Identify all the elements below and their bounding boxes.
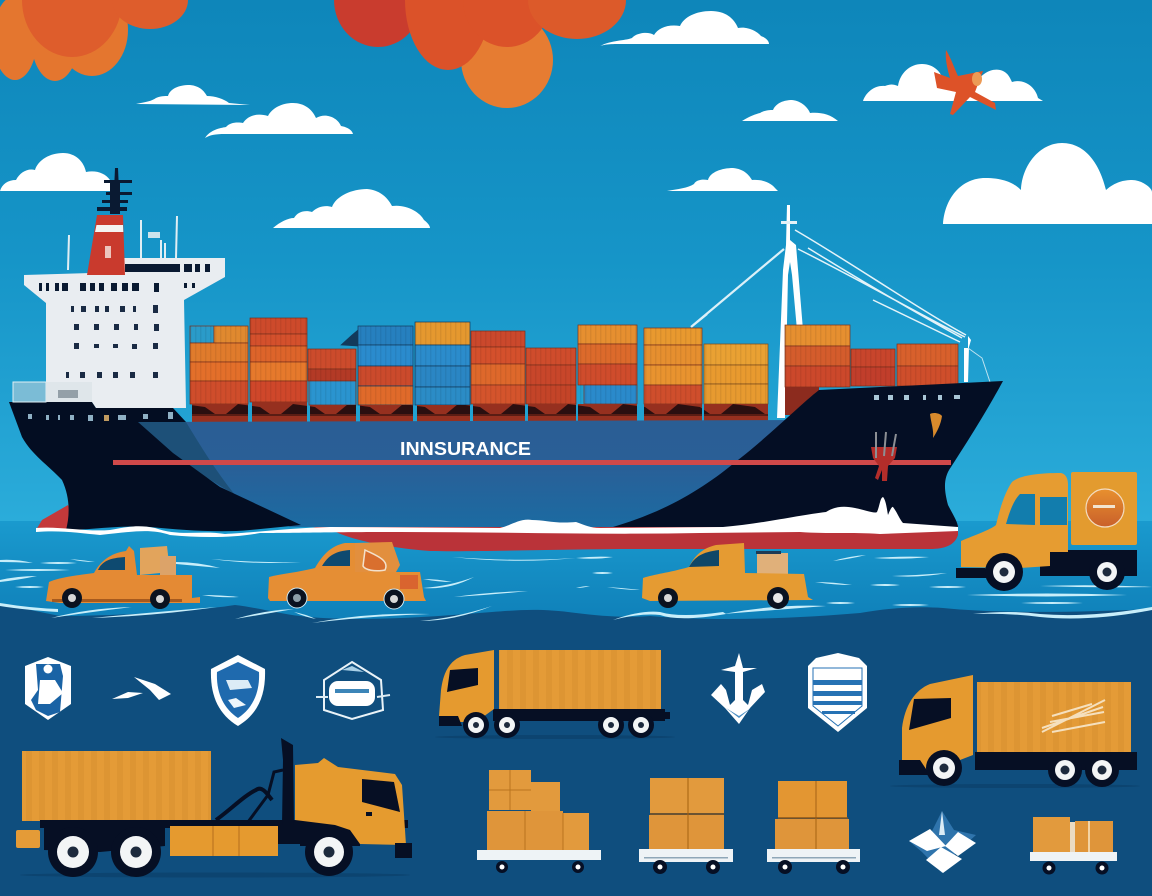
containers: stack 11: [785, 325, 850, 415]
bow emblem: [871, 432, 897, 481]
containers: stack 4: [341, 326, 413, 422]
cloud 6: [0, 153, 110, 191]
ship superstructure: [13, 168, 225, 408]
containers: stack 7: [526, 348, 576, 422]
cloud 5: [205, 103, 353, 138]
containers: stack 8: [578, 325, 637, 422]
icon 2: fish: [112, 677, 171, 700]
pallet of boxes 3: [767, 781, 860, 874]
orange truck right: [899, 675, 1137, 787]
funnel: [87, 215, 125, 275]
shield icon 3: [211, 655, 265, 726]
cabin portholes: [66, 305, 159, 378]
hull: dark blue shade: [138, 422, 235, 495]
wheels: [463, 712, 489, 738]
containers: stack 10: [704, 344, 768, 422]
cloud 3: [742, 100, 838, 121]
sea: [0, 521, 1152, 621]
pallet of boxes 4: [1030, 817, 1117, 874]
wheels: [48, 827, 98, 877]
hull: red stripe: [113, 460, 951, 465]
containers: stack 12: [851, 349, 895, 386]
ship mast and crane: [691, 205, 990, 418]
hull: blue midsection: [130, 420, 815, 527]
bow deck markers: [874, 395, 960, 400]
cargo ship: [9, 168, 1003, 551]
containers: stack 2: [250, 318, 307, 422]
hull: red waterline left: [36, 505, 76, 530]
mast: [97, 168, 132, 214]
wheels: [926, 750, 962, 786]
white clouds: [0, 11, 1152, 228]
hull: foam waterline: [36, 497, 958, 537]
cloud 7: [273, 189, 430, 228]
containers: stack 3: [308, 349, 356, 422]
anchor icon 5: [711, 653, 765, 724]
cloud 1: [600, 11, 769, 46]
delivery truck on water 1: [46, 546, 200, 609]
airplane icon: [934, 50, 996, 115]
stern deck markers: [28, 412, 173, 421]
pallet of boxes 1: [477, 770, 601, 873]
diamond icon 7: [909, 811, 976, 873]
hull: black stern: [9, 402, 301, 531]
containers: stack 9: [644, 328, 702, 422]
wheels: [62, 588, 82, 608]
antennae: [68, 216, 177, 270]
shield icon 1: [25, 657, 71, 720]
wheels: [658, 588, 678, 608]
cloud 2: [863, 64, 1043, 101]
cloud 9: [943, 143, 1152, 224]
ship name: insurance: INNSURANCE: [400, 439, 531, 459]
pallet of boxes 2: [639, 778, 733, 874]
striped shield icon 6: [808, 653, 867, 732]
delivery truck on water 3: [642, 543, 813, 609]
bow small orange mark: [930, 413, 942, 438]
hull: black bow: [613, 381, 1003, 528]
containers: stack 6: [471, 331, 525, 422]
badge icon 4: [316, 662, 390, 719]
wheels: [287, 588, 307, 608]
ground panel: [0, 603, 1152, 896]
sky background: [0, 0, 1152, 522]
containers: stack 1: [190, 326, 248, 422]
orange clouds top left: [0, 0, 188, 81]
cloud 4: [136, 85, 250, 105]
hull: red waterline main: [300, 525, 958, 551]
delivery truck on water 2: [268, 542, 426, 609]
foam on the sea: [0, 555, 1152, 623]
cloud 8: [667, 168, 778, 191]
bridge windows: [39, 264, 210, 292]
containers: stack 5: [415, 322, 470, 422]
wheels: [985, 553, 1023, 591]
orange truck top: [439, 650, 670, 738]
orange clouds top centre: [334, 0, 626, 108]
ground shadows under vehicles: [20, 735, 1140, 878]
containers: stack 13: [897, 344, 958, 386]
truck side lettering: [1042, 700, 1105, 732]
large orange van right: [956, 472, 1137, 591]
large orange truck left: [16, 738, 412, 877]
